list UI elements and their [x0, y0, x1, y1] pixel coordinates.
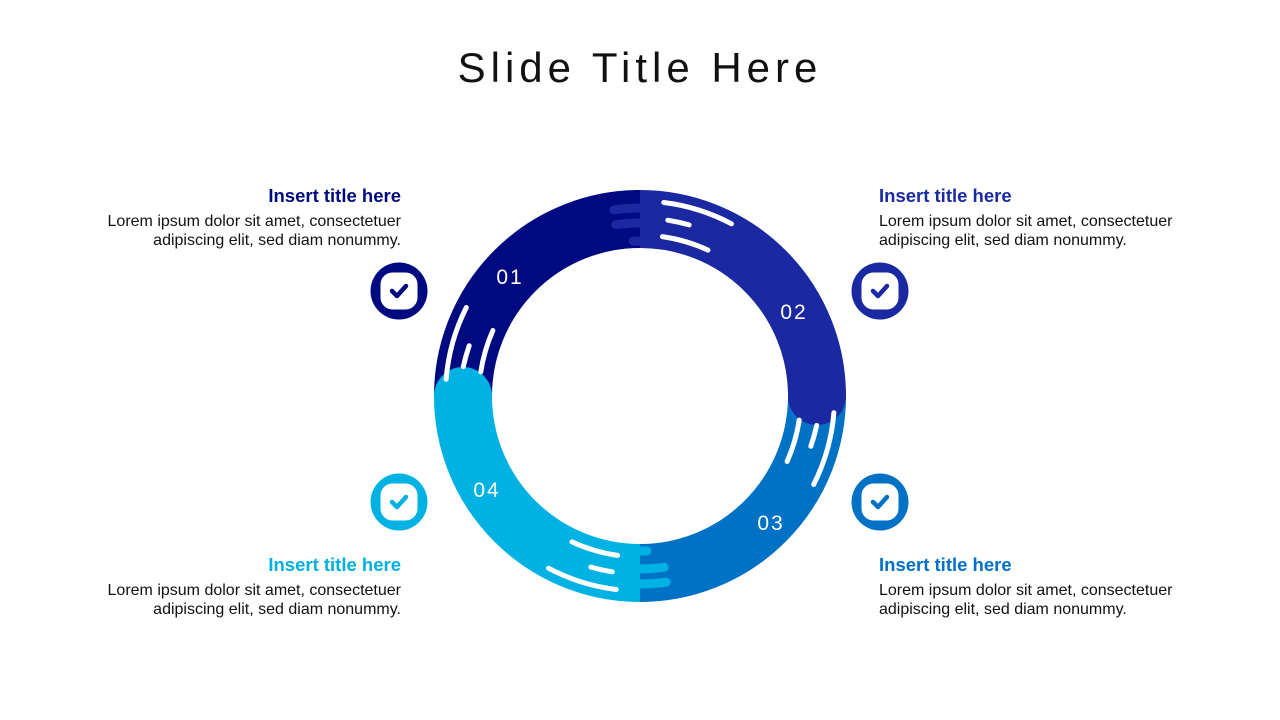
text block 02: Lorem ipsum dolor sit amet, consectetuer — [879, 213, 1172, 230]
text block 03: adipiscing elit, sed diam nonummy. — [879, 601, 1127, 618]
text block 02: adipiscing elit, sed diam nonummy. — [879, 232, 1127, 249]
text block 03: Lorem ipsum dolor sit amet, consectetuer — [879, 582, 1172, 599]
segment 01 — [463, 219, 640, 396]
segment 02 — [640, 219, 846, 425]
text block 02: Insert title here — [879, 185, 1012, 206]
stripes bottom/right — [548, 413, 834, 590]
icon: check 03 — [852, 474, 908, 530]
icon: check 01 — [370, 262, 428, 320]
text block 03: Insert title here — [879, 554, 1012, 575]
icon: check 02 — [852, 262, 908, 320]
number labels: 01 — [496, 266, 524, 289]
segment 04 — [434, 367, 640, 573]
number labels — [473, 266, 808, 535]
title: Slide Title Here — [458, 44, 822, 91]
text block 01: Insert title here — [268, 185, 401, 206]
text block 03 — [879, 554, 1172, 618]
text block 01 — [108, 185, 401, 249]
segment 03 — [640, 396, 817, 573]
stripes top/left — [446, 202, 732, 379]
text block 04 — [108, 554, 401, 618]
icon: check 04 — [370, 474, 428, 530]
text block 01: adipiscing elit, sed diam nonummy. — [153, 232, 401, 249]
text block 01: Lorem ipsum dolor sit amet, consectetuer — [108, 213, 401, 230]
number labels: 02 — [780, 301, 808, 324]
text block 04: Insert title here — [268, 554, 401, 575]
number labels: 04 — [473, 479, 501, 502]
number labels: 03 — [757, 512, 785, 535]
text block 04: Lorem ipsum dolor sit amet, consectetuer — [108, 582, 401, 599]
text block 04: adipiscing elit, sed diam nonummy. — [153, 601, 401, 618]
text block 02 — [879, 185, 1172, 249]
